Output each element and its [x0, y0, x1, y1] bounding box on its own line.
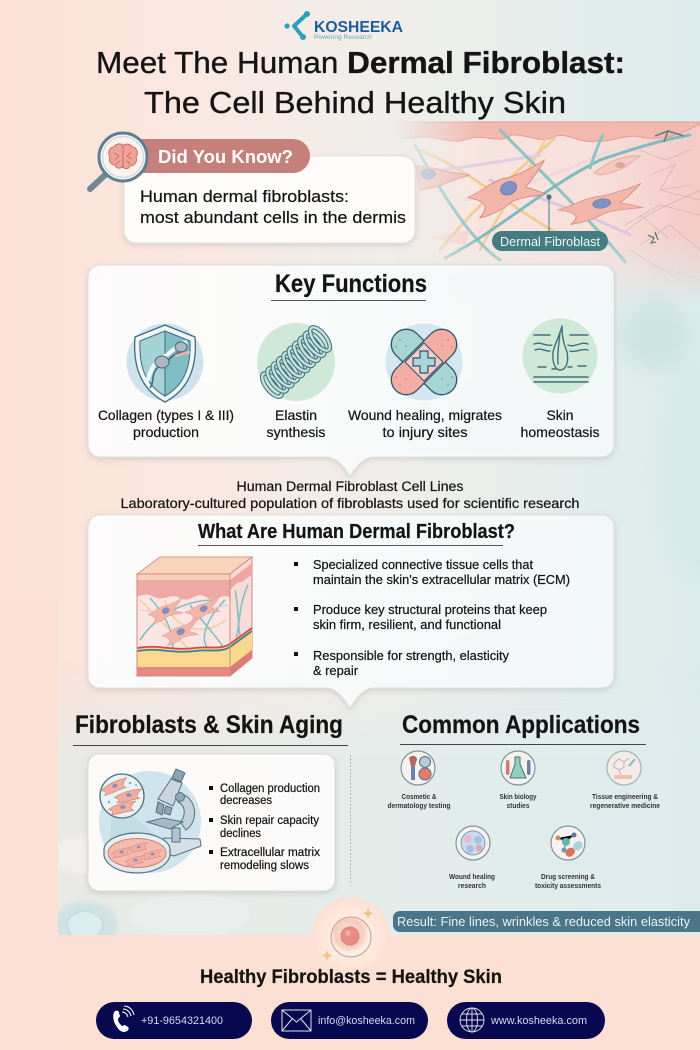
- function labels: synthesis: [266, 424, 326, 440]
- application labels: Tissue engineering &: [592, 794, 658, 801]
- icon: wound healing cells: [456, 826, 490, 860]
- function labels: homeostasis: [520, 424, 600, 440]
- icon: skin and hair follicle: [522, 318, 598, 394]
- logo: Kosheeka: KOSHEEKA: [314, 19, 403, 36]
- panel: what are human dermal fibroblast: [88, 515, 614, 708]
- title: The Cell Behind Healthy Skin: [144, 85, 566, 120]
- contact: phone: +91-9654321400: [141, 1015, 223, 1027]
- list: skin aging bullets: remodeling slows: [220, 860, 309, 872]
- result banner: [393, 911, 700, 932]
- illustration: dermis with fibroblasts: [400, 122, 700, 290]
- application labels: research: [458, 883, 486, 890]
- panel: did you know: [90, 133, 415, 243]
- function labels: Wound healing, migrates: [348, 407, 502, 423]
- contact: website: www.kosheeka.com: [490, 1015, 587, 1027]
- logo: Kosheeka: Powering Research: [314, 35, 372, 41]
- icon: crossed bandages: [385, 323, 463, 401]
- icon: healthy cell: [312, 897, 390, 975]
- function labels: to injury sites: [382, 424, 468, 440]
- application labels: studies: [506, 803, 530, 810]
- contact: email: info@kosheeka.com: [318, 1015, 415, 1027]
- list: what are bullets: maintain the skin's extracellular matrix (ECM): [313, 573, 570, 587]
- application labels: toxicity assessments: [535, 883, 601, 890]
- list: what are bullets: skin firm, resilient, and functional: [313, 618, 501, 632]
- result banner: Result: Fine lines, wrinkles & reduced skin elasticity: [397, 915, 691, 929]
- function labels: [98, 407, 600, 440]
- application labels: Cosmetic &: [402, 794, 436, 801]
- list: what are bullets: [294, 558, 570, 678]
- did you know text: most abundant cells in the dermis: [140, 208, 406, 227]
- icon: skin cross-section cube: [137, 557, 252, 676]
- application labels: Skin biology: [500, 794, 537, 801]
- did you know pill: Did You Know?: [158, 147, 293, 167]
- application labels: regenerative medicine: [590, 803, 660, 810]
- title: Meet The Human Dermal Fibroblast:: [96, 45, 625, 80]
- contact: phone: [96, 1002, 252, 1039]
- application labels: Wound healing: [449, 874, 495, 881]
- panel: key functions: [88, 265, 614, 476]
- contact: email: [271, 1002, 428, 1039]
- icon: magnifier with brain: [90, 133, 147, 189]
- list: skin aging bullets: [209, 783, 320, 872]
- icon: cosmetics: [401, 751, 435, 785]
- list: what are bullets: & repair: [313, 664, 358, 678]
- application labels: Drug screening &: [541, 874, 595, 881]
- application labels: [388, 794, 660, 890]
- function labels: Collagen (types I & III): [98, 407, 234, 423]
- applications grid: [388, 751, 660, 890]
- application labels: dermatology testing: [388, 803, 450, 810]
- icon: tissue engineering: [607, 751, 641, 785]
- list: what are bullets: Specialized connective tissue cells that: [313, 558, 534, 572]
- text block: cell lines: Laboratory-cultured population of fibroblasts used for scientific research: [120, 496, 580, 511]
- callout: dermal fibroblast label: Dermal Fibroblast: [500, 234, 600, 249]
- list: skin aging bullets: Skin repair capacity: [220, 815, 319, 827]
- did you know text: Human dermal fibroblasts:: [140, 187, 349, 206]
- icon: microscope and petri dish: [99, 769, 201, 873]
- function labels: production: [133, 424, 199, 440]
- icon: shield with DNA: [126, 324, 204, 402]
- did you know pill: [123, 139, 310, 173]
- logo: Kosheeka: [284, 11, 403, 41]
- text block: cell lines: [120, 479, 580, 511]
- did you know text: [140, 187, 406, 227]
- panel: skin aging: [88, 754, 335, 891]
- list: what are bullets: Produce key structural proteins that keep: [313, 603, 547, 617]
- function labels: Skin: [546, 407, 574, 423]
- list: what are bullets: Responsible for strength, elasticity: [313, 649, 510, 663]
- text block: cell lines: Human Dermal Fibroblast Cell Lines: [236, 479, 464, 494]
- icon: lab flasks: [501, 751, 535, 785]
- list: skin aging bullets: Collagen production: [220, 783, 320, 795]
- heading: fibroblasts and skin aging: Fibroblasts & Skin Aging: [75, 711, 343, 739]
- callout: dermal fibroblast label: [492, 194, 608, 251]
- heading: common applications: Common Applications: [402, 711, 640, 739]
- function labels: Elastin: [275, 407, 317, 423]
- heading: what are: What Are Human Dermal Fibroblast?: [198, 521, 515, 543]
- list: skin aging bullets: declines: [220, 828, 261, 840]
- icon: drug molecule and capsule: [551, 826, 585, 860]
- tagline: Healthy Fibroblasts = Healthy Skin: [200, 967, 502, 988]
- contact: website: [447, 1002, 605, 1039]
- list: skin aging bullets: decreases: [220, 795, 272, 807]
- title: [96, 45, 625, 120]
- microscope: [147, 769, 201, 856]
- icon: elastin coil: [257, 323, 335, 401]
- heading: key functions: Key Functions: [275, 270, 427, 298]
- list: skin aging bullets: Extracellular matrix: [220, 847, 320, 859]
